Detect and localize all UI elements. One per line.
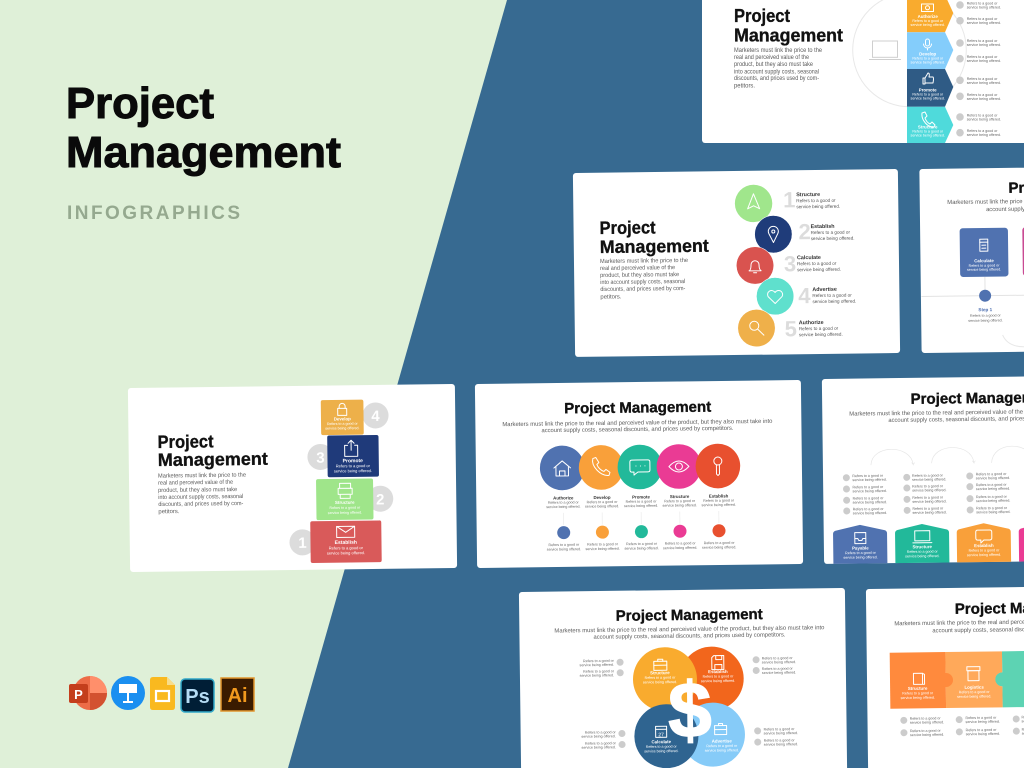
numbered list: Refers to a good or <box>967 55 998 59</box>
list column 1: service being offered. <box>853 500 887 505</box>
numbered list: Refers to a good or <box>967 2 998 6</box>
list under pieces: service being offered. <box>966 732 1000 736</box>
tab: Establish <box>957 523 1011 562</box>
text block: product, but they also must take <box>158 487 238 494</box>
side list: upper left: service being offered. <box>579 663 614 667</box>
item: Develop: Refers to a good or <box>587 500 618 504</box>
arcs <box>871 446 1024 465</box>
puzzle piece: Logistics <box>945 651 1003 708</box>
numbered list: Refers to a good or <box>967 129 998 133</box>
text block: Marketers must link the price to the real and perceived value of the product, but they also must take into <box>502 419 773 428</box>
puzzle piece: Logistics: service being offered. <box>957 694 991 699</box>
icon: Keynote <box>111 676 145 710</box>
text block: real and perceived value of the <box>734 55 810 61</box>
side list: lower left: service being offered. <box>581 734 616 739</box>
chevron: Develop: service being offered. <box>911 60 945 64</box>
puzzle piece: Structure: service being offered. <box>901 696 935 700</box>
block 3: Promote: service being offered. <box>334 468 372 473</box>
text block: account supply costs, seasonal discounts, and prices used by competitors. <box>541 426 734 434</box>
list column 1: service being offered. <box>852 478 887 482</box>
step 3: Refers to a good or <box>797 261 837 266</box>
list column 1: service being offered. <box>853 489 887 493</box>
item: Structure <box>656 444 702 550</box>
circle: Establish <box>679 646 744 711</box>
item: Authorize: Refers to a good or <box>548 543 580 547</box>
panel: arcs and tabs slide <box>822 375 1024 564</box>
text block: petitors. <box>600 294 622 301</box>
puzzle piece: green <box>995 650 1024 707</box>
step 4: 4 <box>798 283 811 308</box>
step 1: 1 <box>783 187 796 212</box>
item: Establish <box>695 443 741 550</box>
circle: Advertise <box>681 702 745 767</box>
step 3: 3 <box>784 251 796 276</box>
side list: upper right: service being offered. <box>762 671 796 675</box>
block 4: Develop <box>321 399 389 435</box>
list column 2: service being offered. <box>912 477 946 482</box>
tab: Structure: Structure <box>912 544 933 549</box>
numbered list: Refers to a good or <box>967 93 998 97</box>
heading: Project <box>157 431 214 452</box>
text block <box>502 419 773 435</box>
circle: Calculate: 27 <box>658 732 664 738</box>
side list: upper right: service being offered. <box>762 660 796 665</box>
chevron: Authorize: Refers to a good or <box>912 19 944 23</box>
tab: Payable: Refers to a good or <box>845 551 877 555</box>
text block: petitors. <box>734 83 755 89</box>
text block <box>158 473 247 515</box>
step 4 <box>756 277 856 315</box>
text block: product, but they also must take <box>600 272 680 279</box>
text block: discounts, and prices used by com- <box>158 501 243 508</box>
circle: Structure: Structure <box>650 670 670 675</box>
title: Project <box>66 79 214 128</box>
item: Promote: Refers to a good or <box>626 499 657 504</box>
title: Management <box>66 128 341 177</box>
heading: Management <box>158 449 268 470</box>
panel: stacked blocks slide <box>128 384 457 572</box>
list column 3: Refers to a good or <box>976 506 1008 510</box>
step 1: Refers to a good or <box>796 198 836 203</box>
tab: Structure: Refers to a good or <box>907 550 938 554</box>
side list: lower left: service being offered. <box>581 745 616 750</box>
step marker: service being offered. <box>968 318 1003 323</box>
item: Promote: service being offered. <box>624 546 659 551</box>
item: Develop <box>579 445 624 551</box>
icon: Photoshop <box>181 679 214 712</box>
list under pieces <box>900 715 1024 737</box>
numbered list: service being offered. <box>967 43 1001 47</box>
list under pieces: service being offered. <box>910 733 944 737</box>
panel: top chevron slide <box>702 0 1024 143</box>
text block: Marketers must link the price to the real and perceived value of the product, but they also must take into <box>554 625 825 635</box>
text block: into account supply costs, seasonal <box>734 69 819 75</box>
panel: dollar venn slide <box>519 588 847 768</box>
heading <box>157 431 268 470</box>
side list: lower right: Refers to a good or <box>764 727 795 732</box>
chevron: Develop <box>907 32 953 69</box>
item: Authorize: service being offered. <box>547 547 581 552</box>
puzzle piece: Structure: Structure <box>908 686 928 691</box>
list column 3 <box>966 472 1011 515</box>
step 5: 5 <box>785 316 797 341</box>
list under pieces: service being offered. <box>910 720 944 725</box>
numbered list: Refers to a good or <box>967 17 998 21</box>
step marker: Step 1 <box>978 307 993 312</box>
list column 3: Refers to a good or <box>976 483 1007 487</box>
step 3 <box>736 246 841 284</box>
subtitle: INFOGRAPHICS <box>67 203 240 224</box>
numbered list: Refers to a good or <box>967 114 998 118</box>
chevron: Develop: Develop <box>919 51 937 56</box>
side list: upper left <box>579 659 624 678</box>
text block: into account supply costs, seasonal <box>600 279 685 286</box>
list column 1: Refers to a good or <box>853 496 884 501</box>
puzzle piece: Logistics: Logistics <box>964 685 984 690</box>
text block <box>734 48 823 89</box>
list column 2: Refers to a good or <box>912 496 944 500</box>
title <box>66 79 341 177</box>
item: Establish: service being offered. <box>702 503 736 507</box>
icon: Photoshop: Ps <box>185 686 210 708</box>
chevron: Authorize <box>907 0 953 32</box>
item: Structure: Refers to a good or <box>664 499 696 503</box>
side list: upper right <box>753 656 796 675</box>
chevron: Structure <box>907 107 953 143</box>
panel: right steps slide <box>919 165 1024 353</box>
puzzle piece: Structure: Refers to a good or <box>902 691 934 696</box>
item: Establish: Establish <box>709 493 729 499</box>
list column 2: service being offered. <box>912 488 947 493</box>
text block: discounts, and prices used by com- <box>600 286 685 293</box>
block 2: Structure: 2 <box>376 491 385 508</box>
block: Calculate: Calculate <box>974 258 994 263</box>
tab: pink <box>1019 522 1024 562</box>
step 5: Refers to a good or <box>799 326 839 331</box>
step 2 <box>754 215 855 253</box>
item: Authorize: service being offered. <box>546 505 581 509</box>
chevron: Structure: service being offered. <box>911 134 945 138</box>
block 2: Structure: Structure <box>335 500 355 505</box>
item: Establish: service being offered. <box>702 545 736 550</box>
list column 2: Refers to a good or <box>912 474 944 478</box>
heading: Project <box>734 6 790 26</box>
block 2: Structure: service being offered. <box>328 511 362 515</box>
list under pieces: service being offered. <box>966 720 1000 724</box>
text block <box>600 258 689 301</box>
list column 1 <box>843 474 887 516</box>
chevron: Promote: service being offered. <box>911 96 945 100</box>
text block: real and perceived value of the <box>158 480 234 487</box>
list under pieces: Refers to a good or <box>910 729 942 733</box>
list under pieces: Refers to a good or <box>910 716 941 721</box>
numbered list: service being offered. <box>967 133 1001 137</box>
step 5 <box>738 308 843 347</box>
text block <box>849 408 1024 424</box>
step 1 <box>735 184 840 222</box>
tab: Structure: service being offered. <box>905 554 939 558</box>
text block: Marketers must link the price to the <box>600 258 689 265</box>
list column 1: service being offered. <box>853 511 887 515</box>
text block <box>894 618 1024 635</box>
list under pieces: Refers to a good or <box>966 728 997 732</box>
block 1: Establish: Refers to a good or <box>329 545 364 551</box>
item: Authorize: Authorize <box>553 495 574 501</box>
numbered list: service being offered. <box>967 81 1001 85</box>
item: Develop: service being offered. <box>585 504 619 509</box>
heading: Management <box>734 25 843 45</box>
item: Authorize <box>540 445 586 552</box>
circle: Calculate: service being offered. <box>644 749 679 753</box>
side list: lower right: service being offered. <box>764 731 798 736</box>
circle: Establish: Establish <box>708 669 728 674</box>
list under pieces: Refers to a good or <box>965 716 997 720</box>
text block: petitors. <box>158 509 180 515</box>
numbered list: Refers to a good or <box>967 39 998 43</box>
block 2: Structure: Refers to a good or <box>329 506 361 510</box>
icon: Illustrator <box>221 678 254 711</box>
list column 2: service being offered. <box>912 510 947 515</box>
item: Structure: service being offered. <box>663 546 697 550</box>
step 1: service being offered. <box>796 204 840 209</box>
numbered list: service being offered. <box>967 59 1001 63</box>
tab: Structure <box>895 524 949 563</box>
step marker: Refers to a good or <box>970 313 1002 318</box>
tab: Establish: Refers to a good or <box>969 548 1000 553</box>
step 4: service being offered. <box>812 299 856 304</box>
panel: five circles slide <box>573 169 900 357</box>
numbered list <box>956 1 1001 137</box>
panel: puzzle slide <box>866 585 1024 768</box>
icon: dollar sign: $ <box>668 666 712 754</box>
block 4: Develop: Refers to a good or <box>327 422 359 426</box>
text block: Marketers must link the price to the <box>158 473 247 480</box>
text block: product, but they also must take <box>734 62 814 68</box>
item: Develop: Refers to a good or <box>587 542 619 547</box>
software icons row <box>69 676 254 712</box>
chevron: Structure: Refers to a good or <box>912 130 944 134</box>
list column 2: service being offered. <box>912 499 947 504</box>
item: Establish: Refers to a good or <box>704 541 735 545</box>
step 2: Refers to a good or <box>811 230 850 235</box>
item: Establish: Refers to a good or <box>703 499 735 503</box>
text block: into account supply costs, seasonal <box>158 494 243 501</box>
block 1: Establish: 1 <box>298 535 307 552</box>
item: Structure: Structure <box>670 494 690 499</box>
block 2: Structure <box>316 478 394 520</box>
item: Develop: service being offered. <box>585 547 620 551</box>
item: Structure: service being offered. <box>663 503 697 508</box>
heading: Project Management <box>616 606 763 625</box>
numbered list: service being offered. <box>967 21 1001 25</box>
chevron: Authorize: service being offered. <box>911 23 945 27</box>
list column 3: service being offered. <box>976 510 1011 514</box>
side list: lower left: Refers to a good or <box>585 730 616 735</box>
circle: Structure <box>633 647 697 712</box>
step 3: service being offered. <box>797 267 841 272</box>
heading <box>734 6 843 45</box>
list column 2 <box>903 473 947 515</box>
side list: lower right: Refers to a good or <box>764 738 795 743</box>
step marker <box>968 289 1003 323</box>
list column 2: Refers to a good or <box>912 507 944 511</box>
text block: Marketers must link the price to the <box>734 48 823 54</box>
item: Authorize: Refers to a good or <box>548 500 580 505</box>
block: pink <box>1022 227 1024 276</box>
side list: lower right: service being offered. <box>764 742 798 747</box>
list column 3: Refers to a good or <box>976 472 1007 476</box>
list column 3: service being offered. <box>976 476 1010 480</box>
side list: upper left: service being offered. <box>580 673 614 678</box>
chevron: Promote <box>907 69 953 107</box>
text block <box>554 625 825 641</box>
circle: Advertise: service being offered. <box>705 748 739 753</box>
chevron: Authorize: Authorize <box>918 14 938 19</box>
block 1: Establish <box>289 520 382 563</box>
side list: lower left: Refers to a good or <box>585 741 617 746</box>
circle: Establish: service being offered. <box>701 679 735 683</box>
list column 1: Refers to a good or <box>852 474 884 478</box>
step 5: service being offered. <box>799 332 843 337</box>
step 2: service being offered. <box>811 236 855 241</box>
circle: Establish: Refers to a good or <box>703 674 734 679</box>
block 1: Establish: Establish <box>335 540 357 546</box>
block: Calculate: Refers to a good or <box>969 264 1000 268</box>
icon: PowerPoint <box>69 676 107 710</box>
step 4: Advertise <box>812 287 837 293</box>
icon: PowerPoint: P <box>74 687 83 702</box>
block: Calculate <box>960 228 1008 277</box>
step 5: Authorize <box>799 320 824 326</box>
item: Promote: Promote <box>632 494 650 500</box>
step 4: Refers to a good or <box>812 293 852 298</box>
block 1: Establish: service being offered. <box>327 550 365 556</box>
circle: Calculate <box>634 704 699 768</box>
text block: account supply costs, seasonal discounts, and prices used by competitors. <box>593 632 786 641</box>
circle: Structure: Refers to a good or <box>645 676 676 680</box>
circle: Structure: service being offered. <box>643 680 677 684</box>
chevron: Promote: Promote <box>919 87 937 92</box>
icon: Google Slides <box>150 677 175 710</box>
block 3: Promote <box>307 435 379 478</box>
side list: upper left: Refers to a good or <box>583 659 615 663</box>
circle outline with laptop <box>853 0 966 107</box>
item: Promote: Refers to a good or <box>626 542 658 546</box>
list column 3: service being offered. <box>976 487 1010 491</box>
tab: Establish: service being offered. <box>967 553 1001 557</box>
heading: Project <box>599 217 656 238</box>
step 3: Calculate <box>797 255 821 261</box>
step 1: Structure <box>796 192 820 198</box>
tab: Establish: Establish <box>974 543 994 548</box>
list column 2: Refers to a good or <box>912 484 944 489</box>
text block: real and perceived value of the <box>600 265 676 272</box>
numbered list: service being offered. <box>967 97 1001 101</box>
chevron: Promote: Refers to a good or <box>912 92 944 96</box>
numbered list: Refers to a good or <box>967 77 998 81</box>
block: Calculate: service being offered. <box>967 267 1001 272</box>
item: Develop: Develop <box>593 495 611 500</box>
side list: upper left: Refers to a good or <box>583 669 615 674</box>
circle: Calculate: Calculate <box>651 739 672 744</box>
panel: five overlapping circles slide <box>475 380 803 568</box>
numbered list: service being offered. <box>967 6 1001 10</box>
tab: Payable: Payable <box>852 545 869 551</box>
block 4: Develop: 4 <box>371 408 380 425</box>
item: Promote: service being offered. <box>624 504 658 508</box>
list column 1: Refers to a good or <box>853 507 884 511</box>
list column 1: Refers to a good or <box>852 485 884 489</box>
side list: lower left <box>581 730 626 750</box>
puzzle piece: Logistics: Refers to a good or <box>959 690 990 694</box>
circle: Advertise: Advertise <box>712 738 732 744</box>
item: Structure: Refers to a good or <box>665 541 696 546</box>
item: Promote <box>617 444 663 551</box>
heading <box>599 217 709 257</box>
icon: Illustrator: Ai <box>228 685 248 707</box>
list column 3: service being offered. <box>976 499 1010 503</box>
heading: Project Management <box>564 399 711 417</box>
block 4: Develop: Develop <box>334 416 351 421</box>
side list: upper right: Refers to a good or <box>762 656 793 661</box>
circle: Calculate: Refers to a good or <box>646 745 678 749</box>
chevron: Develop: Refers to a good or <box>912 56 944 60</box>
heading: Management <box>600 236 709 257</box>
block 4: Develop: service being offered. <box>325 426 360 431</box>
circle: Advertise: Refers to a good or <box>706 744 738 748</box>
chevron: Structure: Structure <box>918 124 938 130</box>
block 3: Promote: Promote <box>343 458 363 464</box>
block 3: Promote: 3 <box>316 450 325 467</box>
step 2: Establish <box>811 224 835 230</box>
numbered list: service being offered. <box>967 118 1001 122</box>
text block <box>947 197 1024 214</box>
puzzle piece: Structure <box>890 652 953 709</box>
tab: Payable: service being offered. <box>843 555 878 560</box>
side list: lower right <box>754 727 798 747</box>
step 2: 2 <box>798 219 811 244</box>
tab: Payable <box>833 525 887 564</box>
list column 3: Refers to a good or <box>976 495 1008 499</box>
block 3: Promote: Refers to a good or <box>336 463 371 468</box>
side list: upper right: Refers to a good or <box>762 667 793 671</box>
text block: discounts, and prices used by com- <box>734 76 819 82</box>
